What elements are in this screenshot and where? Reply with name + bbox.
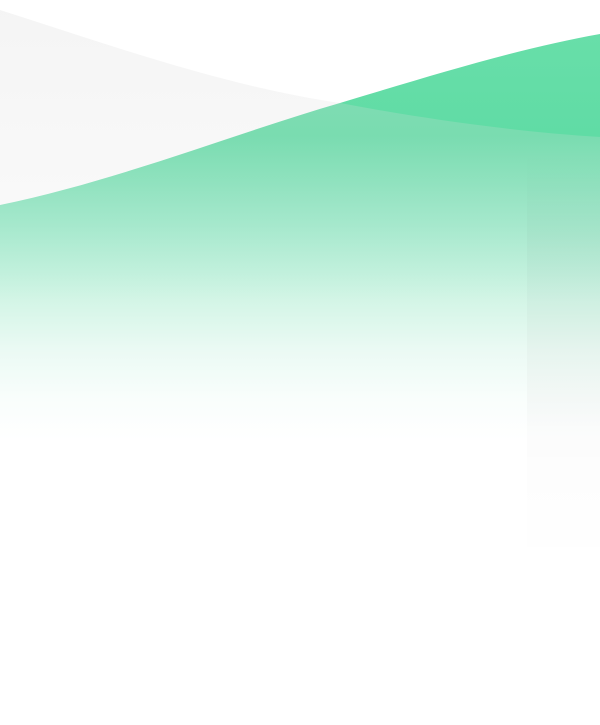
gray wave	[0, 10, 600, 300]
green wave	[0, 34, 600, 440]
right gray column	[527, 150, 600, 570]
